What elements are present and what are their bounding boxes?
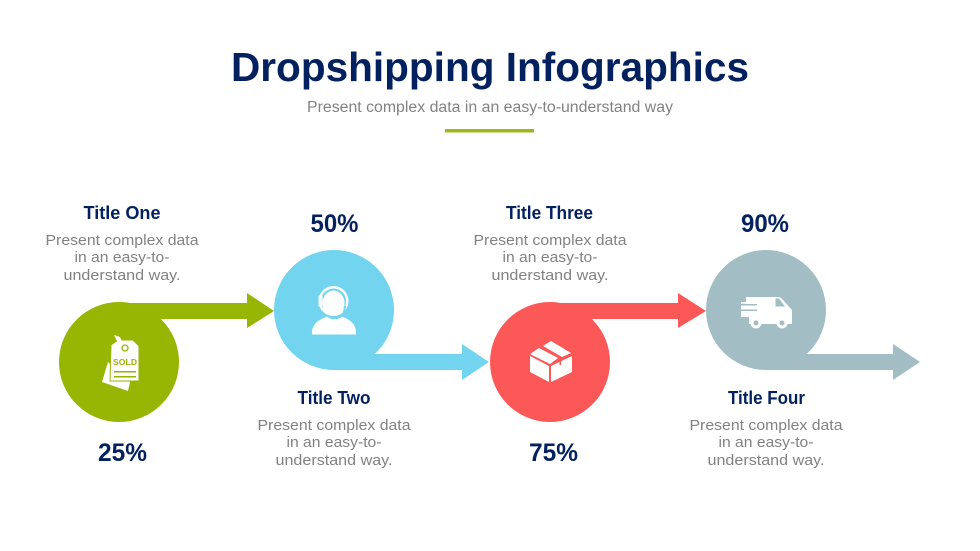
circle: green	[59, 302, 179, 422]
body text: step three	[474, 232, 627, 284]
body text: step four	[690, 417, 843, 469]
percentage: 90%: 90%	[741, 210, 789, 238]
circle: red	[490, 302, 610, 422]
header	[231, 44, 749, 132]
heading: title two: Title Two	[298, 388, 370, 408]
percentage: 50%: 50%	[310, 210, 358, 238]
heading: title three: Title Three	[506, 203, 593, 223]
icon: parcel box	[530, 341, 572, 382]
heading: title one: Title One	[84, 203, 160, 223]
body text: step two: in an easy-to-	[286, 434, 382, 451]
body text: step one: Present complex data	[46, 232, 199, 249]
percentage: 25%: 25%	[98, 439, 147, 467]
arrow: red	[550, 293, 706, 328]
icon: sold tag: SOLD	[113, 357, 137, 367]
icon: headset agent	[312, 286, 356, 334]
accent rule	[445, 129, 534, 132]
panel: step four	[690, 210, 920, 469]
body text: step three: Present complex data	[474, 232, 627, 249]
body text: step three: understand way.	[492, 267, 608, 284]
body text: step one: understand way.	[64, 267, 180, 284]
body text: step two	[258, 417, 411, 469]
subtitle: Present complex data in an easy-to-understand way	[307, 99, 673, 116]
body text: step three: in an easy-to-	[502, 249, 598, 266]
heading: title four: Title Four	[728, 388, 805, 408]
circle: blue	[274, 250, 394, 370]
icon: sold tag	[102, 335, 139, 391]
panel: step three	[474, 203, 706, 467]
body text: step four: understand way.	[708, 452, 824, 469]
arrow: blue	[334, 344, 489, 380]
circle: grey	[706, 250, 826, 370]
body text: step two: Present complex data	[258, 417, 411, 434]
arrow: grey	[766, 344, 920, 380]
percentage: 75%: 75%	[529, 439, 578, 467]
body text: step two: understand way.	[276, 452, 392, 469]
body text: step one	[46, 232, 199, 284]
body text: step four: Present complex data	[690, 417, 843, 434]
title: Dropshipping Infographics	[231, 44, 749, 90]
panel: step one	[46, 203, 274, 467]
arrow: green	[119, 293, 274, 328]
icon: delivery truck	[741, 297, 792, 328]
body text: step four: in an easy-to-	[718, 434, 814, 451]
body text: step one: in an easy-to-	[74, 249, 170, 266]
panel: step two	[258, 210, 489, 469]
